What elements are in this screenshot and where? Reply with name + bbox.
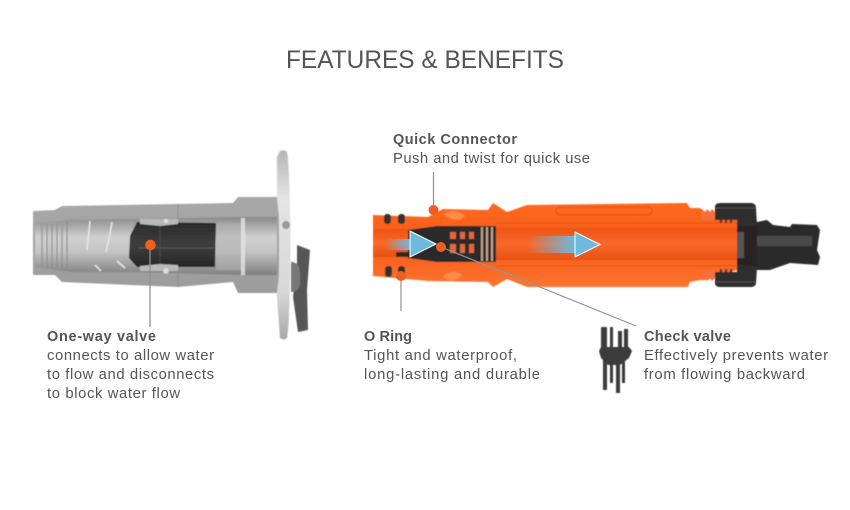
bore spiral ribs <box>87 221 125 271</box>
thread teeth <box>702 209 715 281</box>
flange disc <box>277 150 290 340</box>
moulded grip highlights <box>443 211 465 281</box>
black connector tip <box>740 220 820 270</box>
text: O ring: long-lasting and durable <box>364 367 540 383</box>
text: O ring: Tight and waterproof, <box>364 348 517 364</box>
text: O ring: O Ring <box>364 329 412 345</box>
flow arrow: main channel <box>527 232 600 257</box>
outer shell <box>33 197 279 293</box>
illustration: orange connector cutaway <box>373 203 820 287</box>
quick connector pointer <box>428 172 438 215</box>
check valve pointer <box>436 242 636 326</box>
text: one-way valve: One-way valve <box>47 329 156 345</box>
illustration: grey one-way valve cutaway <box>33 150 310 340</box>
text: one-way valve <box>47 329 214 402</box>
hub <box>737 226 757 266</box>
one-way valve pointer <box>145 240 156 327</box>
main channel <box>496 228 737 260</box>
threads <box>42 222 67 271</box>
text: one-way valve: to flow and disconnects <box>47 367 214 383</box>
title: FEATURES & BENEFITS <box>286 47 564 74</box>
flow arrow: inlet <box>385 231 436 257</box>
O ring pointer <box>396 271 406 311</box>
valve core <box>129 222 216 267</box>
O ring grooves <box>384 214 405 277</box>
clamps <box>140 219 178 226</box>
inlet channel <box>373 229 439 257</box>
engraved logo plate <box>556 207 652 215</box>
text: check valve: from flowing backward <box>644 367 805 383</box>
body edge lines <box>496 223 737 266</box>
icon: check valve part <box>599 327 632 393</box>
text: check valve <box>644 329 828 383</box>
text: quick connector: Quick Connector <box>393 132 517 148</box>
text: one-way valve: to block water flow <box>47 386 180 402</box>
text: check valve: Check valve <box>644 329 731 345</box>
text: quick connector: Push and twist for quick use <box>393 151 590 167</box>
small bolt <box>282 221 290 229</box>
text: quick connector <box>393 132 590 167</box>
knurled nut <box>715 203 757 227</box>
text: check valve: Effectively prevents water <box>644 348 828 364</box>
interior bore <box>35 217 277 275</box>
text: O ring <box>364 329 540 383</box>
text: one-way valve: connects to allow water <box>47 348 214 364</box>
orange body <box>373 203 737 287</box>
check valve chamber <box>437 226 496 262</box>
knob behind flange <box>293 245 310 332</box>
